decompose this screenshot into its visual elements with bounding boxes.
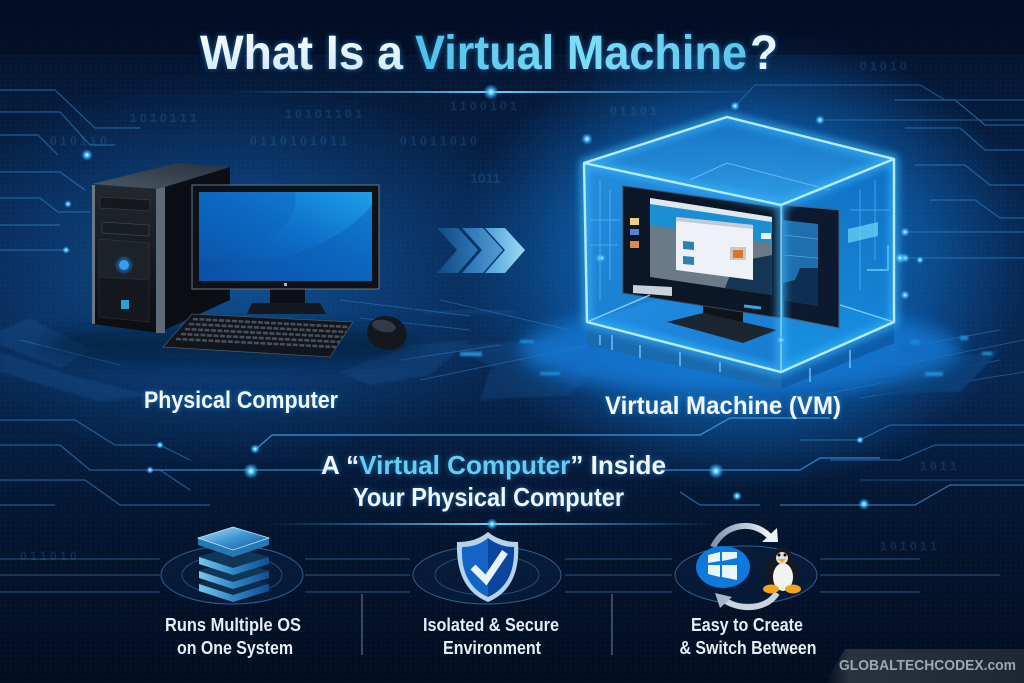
caption	[423, 615, 559, 658]
caption: on One System	[177, 638, 293, 658]
subtitle: A “Virtual Computer” Inside	[321, 450, 666, 480]
binary code background text: 1 0 1 0 1 1 1	[130, 111, 197, 125]
title underline	[225, 84, 765, 100]
dashed horizontal traces in footer	[0, 559, 1000, 592]
icon: windows, linux, switch arrows	[675, 526, 817, 608]
keyboard	[163, 314, 353, 357]
glass cube edges	[584, 117, 894, 372]
binary code background text: 1011	[470, 170, 501, 186]
caption: Easy to Create	[691, 615, 803, 635]
cube back faces	[584, 117, 894, 372]
label: Physical Computer: Physical Computer	[144, 387, 338, 414]
title	[200, 27, 778, 80]
vertical dividers	[362, 594, 612, 655]
floor: circuit board texture	[0, 300, 1024, 402]
mouse	[364, 312, 410, 354]
binary code background text: 0 1 1 0 1	[610, 104, 657, 118]
binary code background text: 0 1 0 1 1 0	[50, 134, 107, 148]
virtual monitor: stand	[667, 305, 777, 343]
caption: Isolated & Secure	[423, 615, 559, 635]
feature: runs multiple OS	[161, 527, 303, 658]
caption: Environment	[443, 638, 541, 658]
cube base	[587, 276, 894, 389]
binary code background text: 0 1 0 1 0	[860, 59, 907, 73]
feature: isolated and secure	[413, 532, 561, 658]
subtitle: Your Physical Computer	[353, 482, 624, 512]
divider line under subtitle	[262, 518, 722, 530]
title: What Is a	[200, 27, 403, 80]
glowing nodes	[62, 101, 924, 510]
virtual machine illustration	[520, 117, 960, 395]
binary code background text: 0 1 1 0 1 0 1 0 1 1	[250, 134, 347, 148]
physical computer illustration	[40, 163, 420, 365]
caption	[680, 615, 816, 658]
binary code background text: 1 1 0 0 1 0 1	[450, 99, 517, 113]
virtual monitor: front screen	[623, 186, 781, 318]
subtitle	[321, 450, 666, 512]
binary code background text: 1 0 1 0 1 1 0 1	[285, 107, 362, 121]
binary code background text: 0 1 0 1 1 0 1 0	[400, 134, 477, 148]
icon: shield with check	[413, 532, 561, 604]
arrows: three chevrons	[437, 228, 525, 273]
binary code background text: 1 0 1 1	[920, 459, 957, 473]
tux penguin	[763, 547, 801, 594]
circuit lines around subtitle	[150, 418, 880, 505]
caption	[165, 615, 301, 658]
caption: Runs Multiple OS	[165, 615, 301, 635]
icon: stacked layers	[161, 527, 303, 604]
feature: easy to create and switch	[675, 526, 817, 658]
caption: & Switch Between	[680, 638, 816, 658]
title: Virtual Machine	[415, 27, 747, 80]
binary code background text: 1 0 1 0 1 1	[880, 539, 937, 553]
binary code background text: 0 1 1 0 1 0	[20, 549, 77, 563]
monitor	[192, 185, 379, 314]
tower	[92, 163, 230, 333]
watermark	[825, 649, 1024, 683]
title: ?	[750, 27, 778, 80]
virtual monitor: rear screen	[783, 205, 839, 328]
label: Virtual Machine (VM): Virtual Machine (VM)	[605, 392, 841, 420]
circuit traces: left and right	[0, 85, 1024, 505]
binary code background text	[20, 59, 957, 563]
